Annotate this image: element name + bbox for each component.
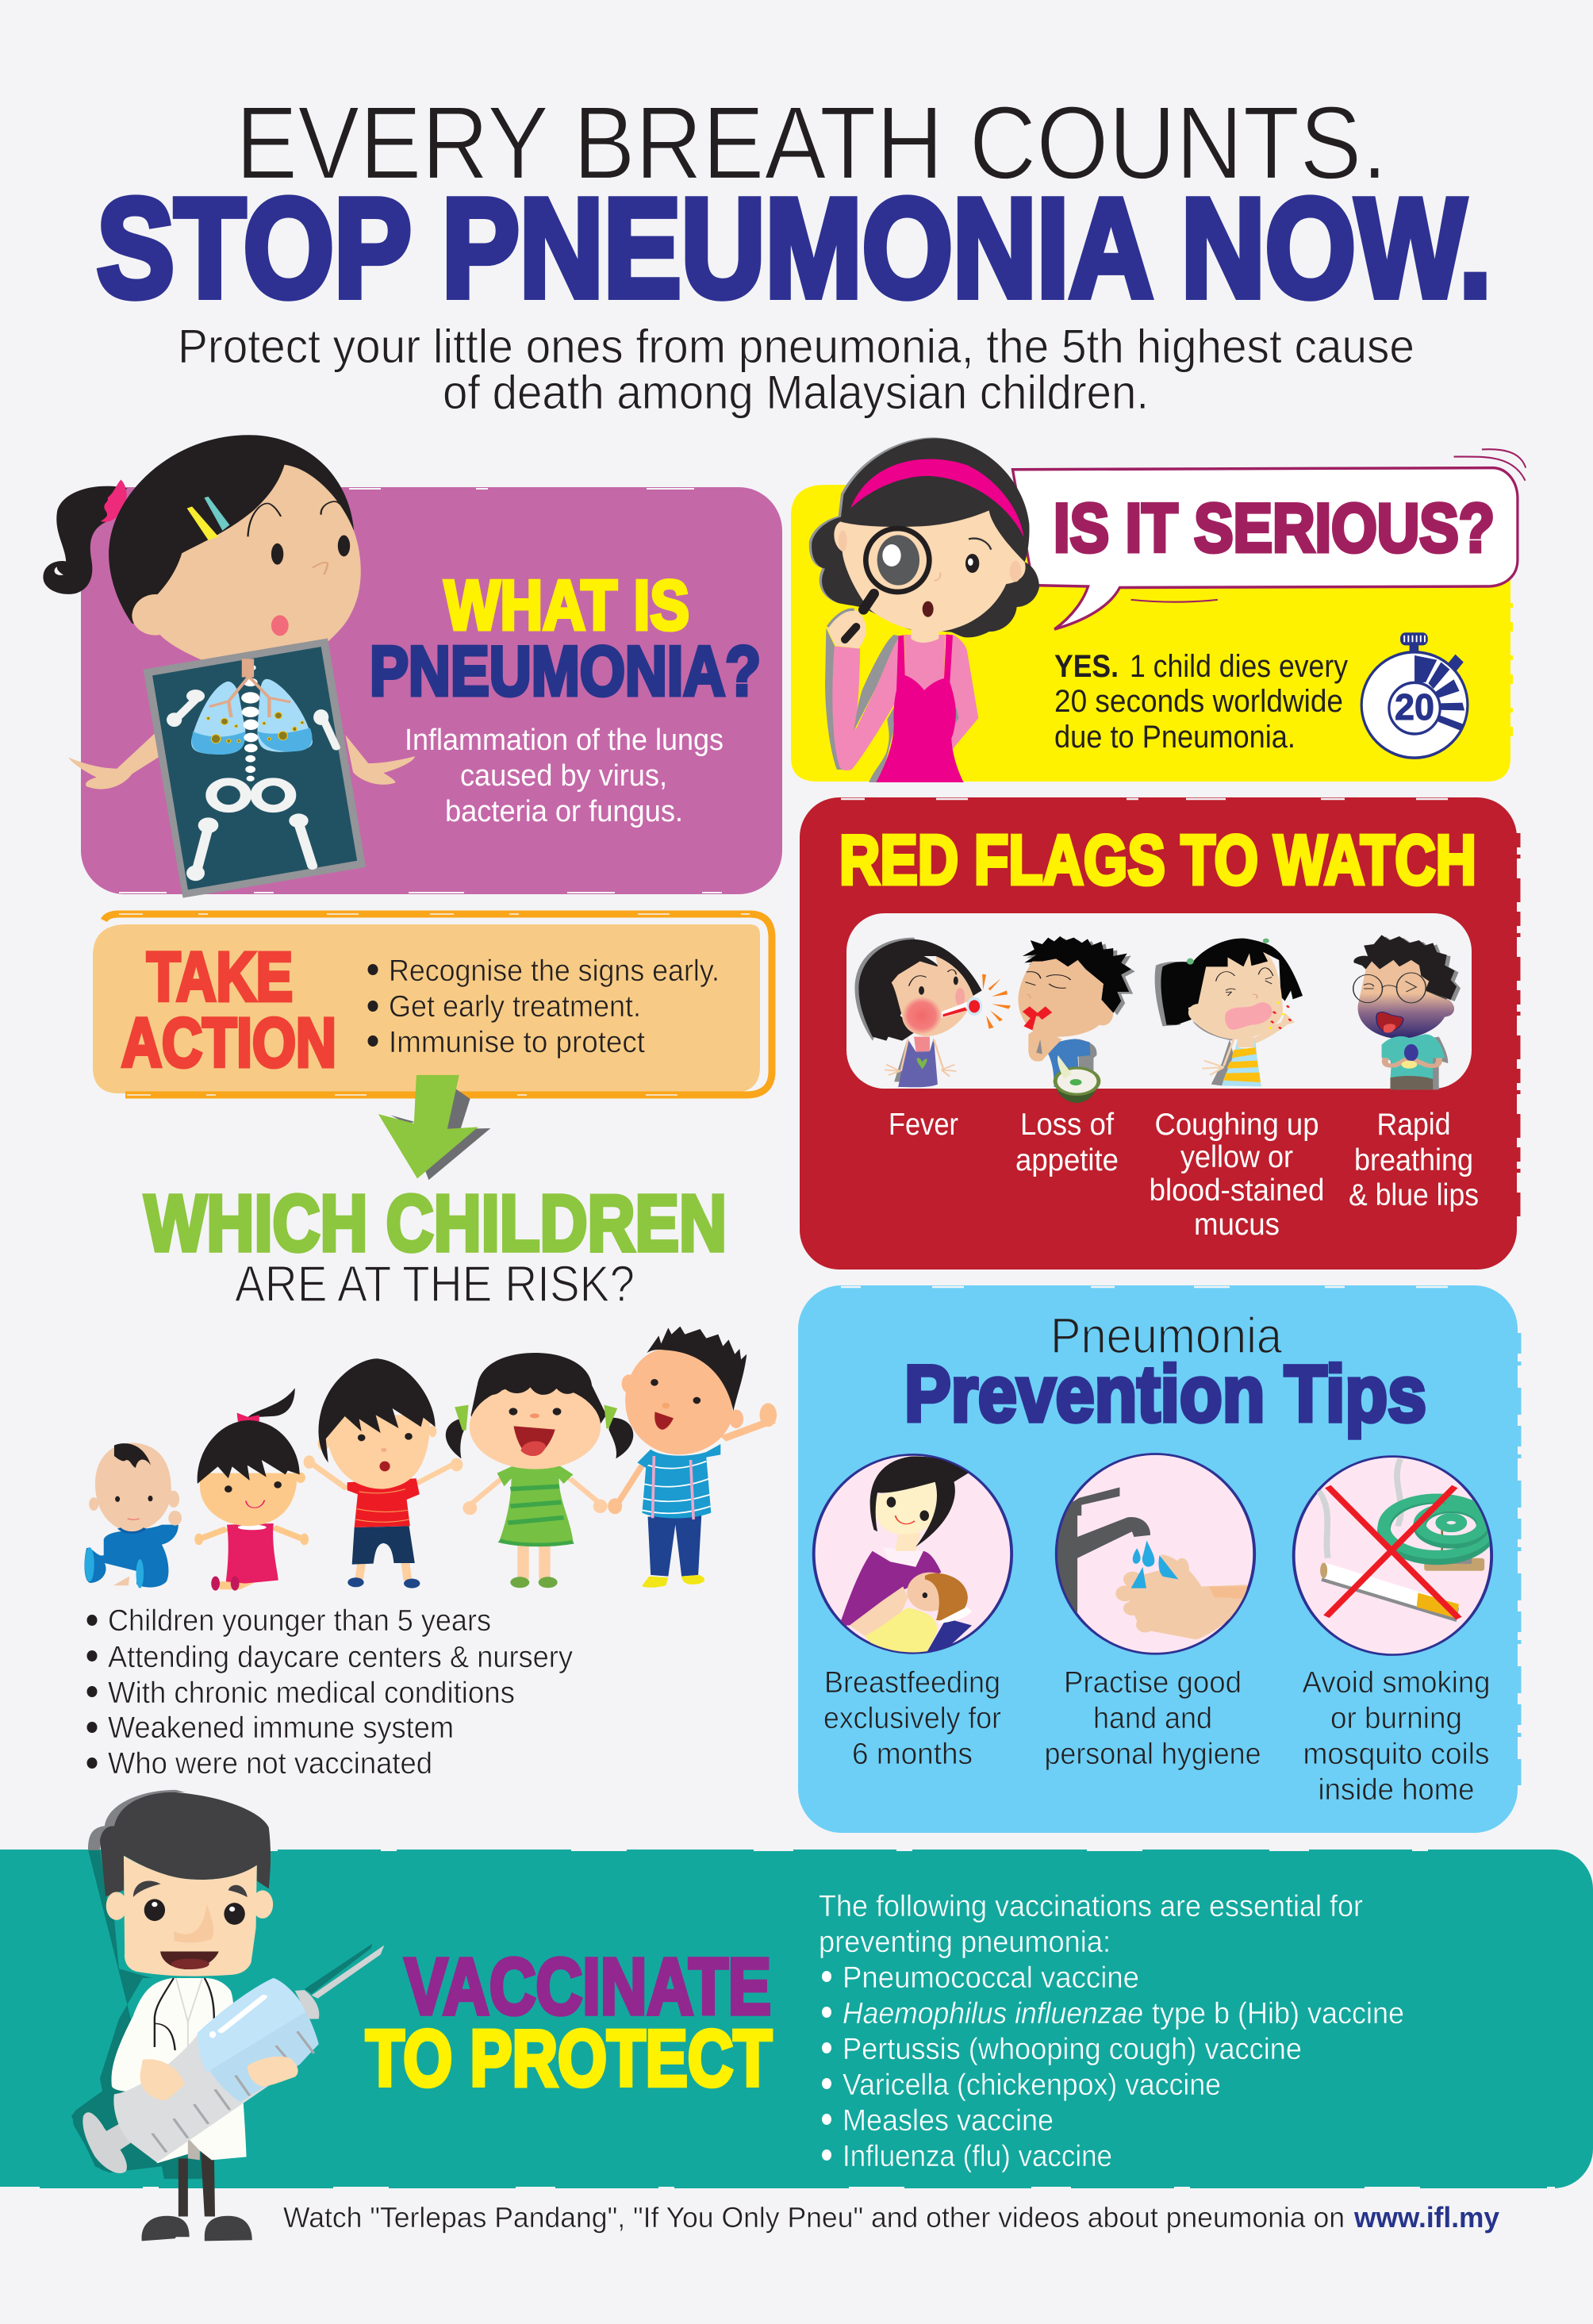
icon: stopwatch (1361, 632, 1468, 758)
tip: breastfeeding: exclusively for (823, 1702, 1001, 1735)
illustration: boy with no appetite (1018, 936, 1135, 1103)
heading: pneumonia: Pneumonia (1050, 1308, 1283, 1364)
subheading: at risk: ARE AT THE RISK? (235, 1255, 635, 1312)
tip: hygiene: personal hygiene (1044, 1738, 1261, 1771)
definition text: bacteria or fungus. (445, 795, 683, 828)
heading: vaccinate: VACCINATE (405, 1942, 771, 2031)
vaccine list: Varicella (chickenpox) vaccine (843, 2069, 1221, 2102)
heading: to protect: TO PROTECT (366, 2014, 772, 2103)
icon: stopwatch: 20 (1395, 686, 1434, 728)
subtitle: Protect your little ones from pneumonia, the 5th highest cause (178, 320, 1415, 373)
panel: is it serious (791, 437, 1526, 782)
website link: www.ifl.my (1353, 2201, 1499, 2234)
illustration: coughing girl (1155, 939, 1303, 1086)
tip: avoid smoke: Avoid smoking (1303, 1666, 1490, 1700)
tip: avoid smoke: inside home (1319, 1773, 1474, 1807)
illustration: five children (84, 1327, 777, 1591)
risk factor list: Attending daycare centers & nursery (108, 1641, 573, 1674)
risk statement: YES. (1054, 649, 1119, 684)
heading: action: ACTION (121, 1005, 336, 1081)
symptom illustration strip (846, 913, 1472, 1089)
heading: which children: WHICH CHILDREN (144, 1179, 727, 1268)
boy in red shirt (304, 1358, 463, 1588)
symptom labels: & blue lips (1349, 1178, 1479, 1212)
girl in green dress (446, 1353, 633, 1588)
vaccine list: Measles vaccine (843, 2104, 1054, 2138)
symptom labels: Rapid (1377, 1108, 1450, 1142)
illustration: girl with x-ray (43, 435, 415, 898)
tip: avoid smoke (1294, 1457, 1491, 1807)
action bullets (368, 955, 720, 1059)
girl with ponytail (194, 1388, 309, 1591)
heading: what is: WHAT IS (444, 566, 689, 644)
panel: red flags (800, 797, 1518, 1270)
risk factor list: With chronic medical conditions (108, 1677, 515, 1710)
panel: what is pneumonia (43, 435, 782, 898)
heading: prevention tips: Prevention Tips (904, 1350, 1426, 1439)
panel: prevention tips (798, 1285, 1519, 1833)
title (97, 84, 1491, 327)
tip: hygiene (1044, 1454, 1261, 1771)
risk statement: 20 seconds worldwide (1054, 684, 1343, 719)
symptom labels: blood-stained (1149, 1174, 1325, 1208)
definition text (405, 724, 724, 828)
symptom labels: mucus (1194, 1208, 1280, 1242)
tip: hygiene: hand and (1093, 1702, 1212, 1735)
illustration: doctor with syringe (71, 1790, 384, 2241)
symptom labels (889, 1108, 1479, 1242)
action bullets: Get early treatment. (389, 990, 641, 1024)
vaccine list: preventing pneumonia: (819, 1926, 1111, 1959)
tip: breastfeeding: Breastfeeding (824, 1666, 1000, 1700)
risk statement: 1 child dies every (1130, 649, 1348, 684)
illustration: fever girl (854, 938, 1011, 1087)
action bullets: Immunise to protect (389, 1026, 645, 1059)
boy in striped shirt (608, 1327, 777, 1588)
heading: pneumonia: PNEUMONIA? (370, 632, 761, 710)
heading: is it serious: IS IT SERIOUS? (1054, 490, 1495, 567)
panel: vaccinate to protect (0, 1850, 1593, 2188)
risk factor list: Who were not vaccinated (108, 1747, 432, 1780)
vaccine list: type b (Hib) vaccine (1152, 1997, 1404, 2030)
tip: hygiene: Practise good (1064, 1666, 1242, 1700)
vaccine list: Influenza (flu) vaccine (843, 2140, 1112, 2173)
risk factor list: Weakened immune system (108, 1711, 454, 1745)
vaccine list: Haemophilus influenzae (843, 1997, 1143, 2030)
symptom labels: Coughing up (1155, 1108, 1319, 1142)
subtitle: of death among Malaysian children. (443, 366, 1149, 419)
vaccine list: Pertussis (whooping cough) vaccine (843, 2033, 1302, 2066)
tip: avoid smoke: mosquito coils (1303, 1738, 1490, 1771)
symptom labels: breathing (1354, 1143, 1473, 1177)
action bullets: Recognise the signs early. (389, 955, 720, 988)
definition text: caused by virus, (460, 759, 667, 793)
subtitle (178, 320, 1415, 419)
risk factor list: Children younger than 5 years (108, 1604, 491, 1638)
risk statement: due to Pneumonia. (1054, 720, 1296, 755)
definition text: Inflammation of the lungs (405, 724, 724, 757)
footer note: Watch "Terlepas Pandang", "If You Only Pneu" and other videos about pneumonia on (283, 2201, 1345, 2234)
speech bubble (1012, 449, 1526, 629)
vaccine list (819, 1890, 1404, 2173)
symptom labels: Loss of (1020, 1108, 1114, 1142)
tip: breastfeeding (814, 1454, 1011, 1771)
illustration: girl with magnifying glass (809, 437, 1039, 782)
vaccine list: Pneumococcal vaccine (843, 1961, 1139, 1995)
heading: take: TAKE (147, 939, 293, 1016)
arrow (378, 1075, 490, 1180)
tip: breastfeeding: 6 months (852, 1738, 973, 1771)
tip: avoid smoke: or burning (1330, 1702, 1462, 1735)
vaccine list: The following vaccinations are essential for (819, 1890, 1363, 1923)
panel: take action (93, 914, 772, 1095)
baby (84, 1442, 182, 1588)
symptom labels: appetite (1015, 1143, 1119, 1177)
risk factor list (87, 1604, 573, 1780)
symptom labels: Fever (889, 1108, 958, 1142)
title line 1: EVERY BREATH COUNTS. (236, 84, 1388, 201)
risk statement (1054, 649, 1348, 755)
symptom labels: yellow or (1180, 1140, 1293, 1174)
illustration: boy with blue lips (1353, 935, 1461, 1089)
